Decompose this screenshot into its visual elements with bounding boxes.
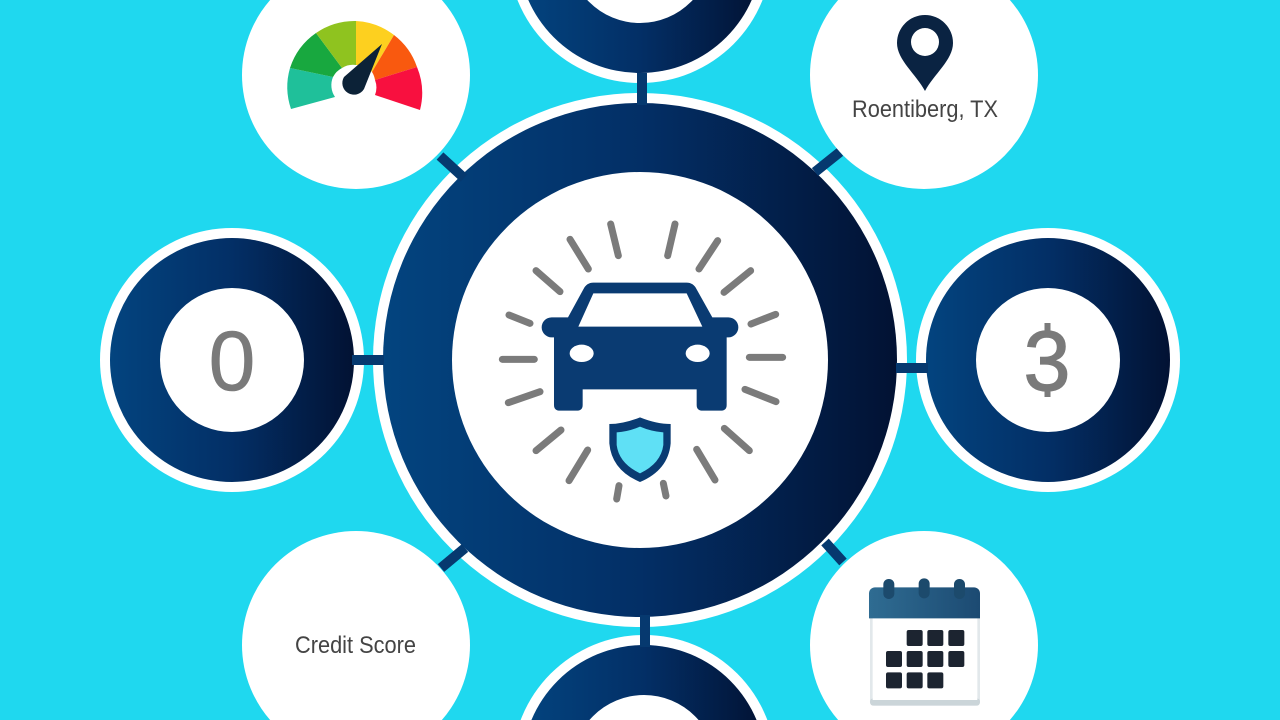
- icon: map pin: [897, 15, 953, 91]
- icon: calendar: [869, 578, 980, 706]
- hub: central dark ring: [373, 93, 907, 627]
- icon: speedometer gauge: [287, 21, 422, 110]
- location label: Roentiberg, TX: [852, 96, 998, 123]
- node: credit gauge: [242, 0, 470, 189]
- node: calendar: [810, 531, 1038, 720]
- icon: radiating rays around car: [502, 224, 783, 499]
- icon: car front view: [542, 283, 738, 411]
- node: left ring with zero: 0: [209, 314, 255, 408]
- node: left ring with zero: [100, 228, 364, 492]
- node: location: [810, 0, 1038, 189]
- node: right ring with dollar-like three: [916, 228, 1180, 492]
- node: credit score label: Credit Score: [295, 632, 416, 659]
- icon: shield: [609, 417, 671, 482]
- node: right ring with dollar-like three: 3: [1024, 314, 1070, 408]
- node: top ring: [508, 0, 772, 83]
- connectors between hub and nodes: [352, 73, 928, 647]
- node: bottom ring: [512, 635, 776, 720]
- node: credit score label: [242, 531, 470, 720]
